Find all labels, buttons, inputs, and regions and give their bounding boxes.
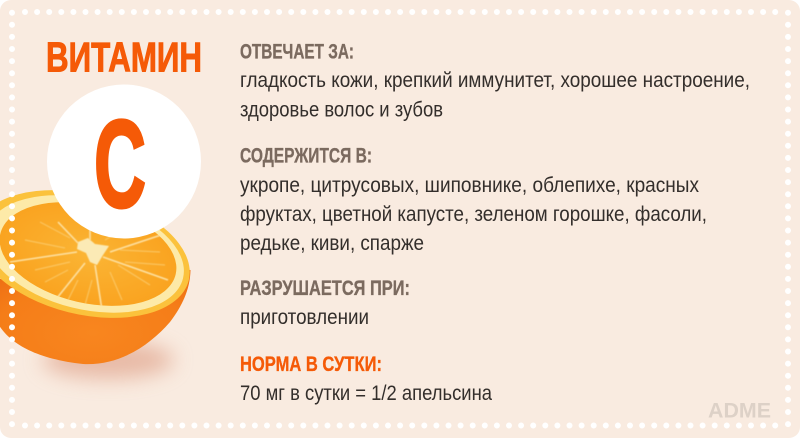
body text (240, 69, 750, 122)
heading: РАЗРУШАЕТСЯ ПРИ: (240, 277, 410, 300)
body text (240, 174, 707, 255)
section: destroyed by (240, 277, 410, 329)
heading: СОДЕРЖИТСЯ В: (240, 144, 372, 168)
heading: ОТВЕЧАЕТ ЗА: (240, 40, 354, 64)
section: daily norm (240, 353, 492, 405)
body text: здоровье волос и зубов (240, 98, 443, 122)
orange peel (0, 260, 190, 364)
watermark: ADME: ADME (708, 400, 771, 422)
orange illustration (0, 190, 190, 390)
orange shadow (42, 341, 174, 379)
body text: укропе, цитрусовых, шиповнике, облепихе, красных (240, 174, 699, 197)
title: ВИТАМИН: ВИТАМИН (46, 34, 202, 80)
orange core (77, 238, 109, 265)
body text: гладкость кожи, крепкий иммунитет, хорошее настроение, (240, 69, 750, 92)
body text: редьке, киви, спарже (240, 232, 424, 255)
section: contained in (240, 144, 707, 255)
orange flesh (0, 186, 187, 322)
body text: фруктах, цветной капусте, зеленом горошке, фасоли, (240, 203, 707, 226)
white circle (47, 84, 201, 238)
heading: НОРМА В СУТКИ: (240, 353, 382, 376)
body text: приготовлении (240, 306, 369, 329)
body text: 70 мг в сутки = 1/2 апельсина (240, 382, 492, 405)
section: responsible for (240, 40, 750, 122)
orange rind (0, 169, 203, 339)
orange segment membranes (10, 222, 170, 310)
letter C: С (94, 96, 146, 234)
